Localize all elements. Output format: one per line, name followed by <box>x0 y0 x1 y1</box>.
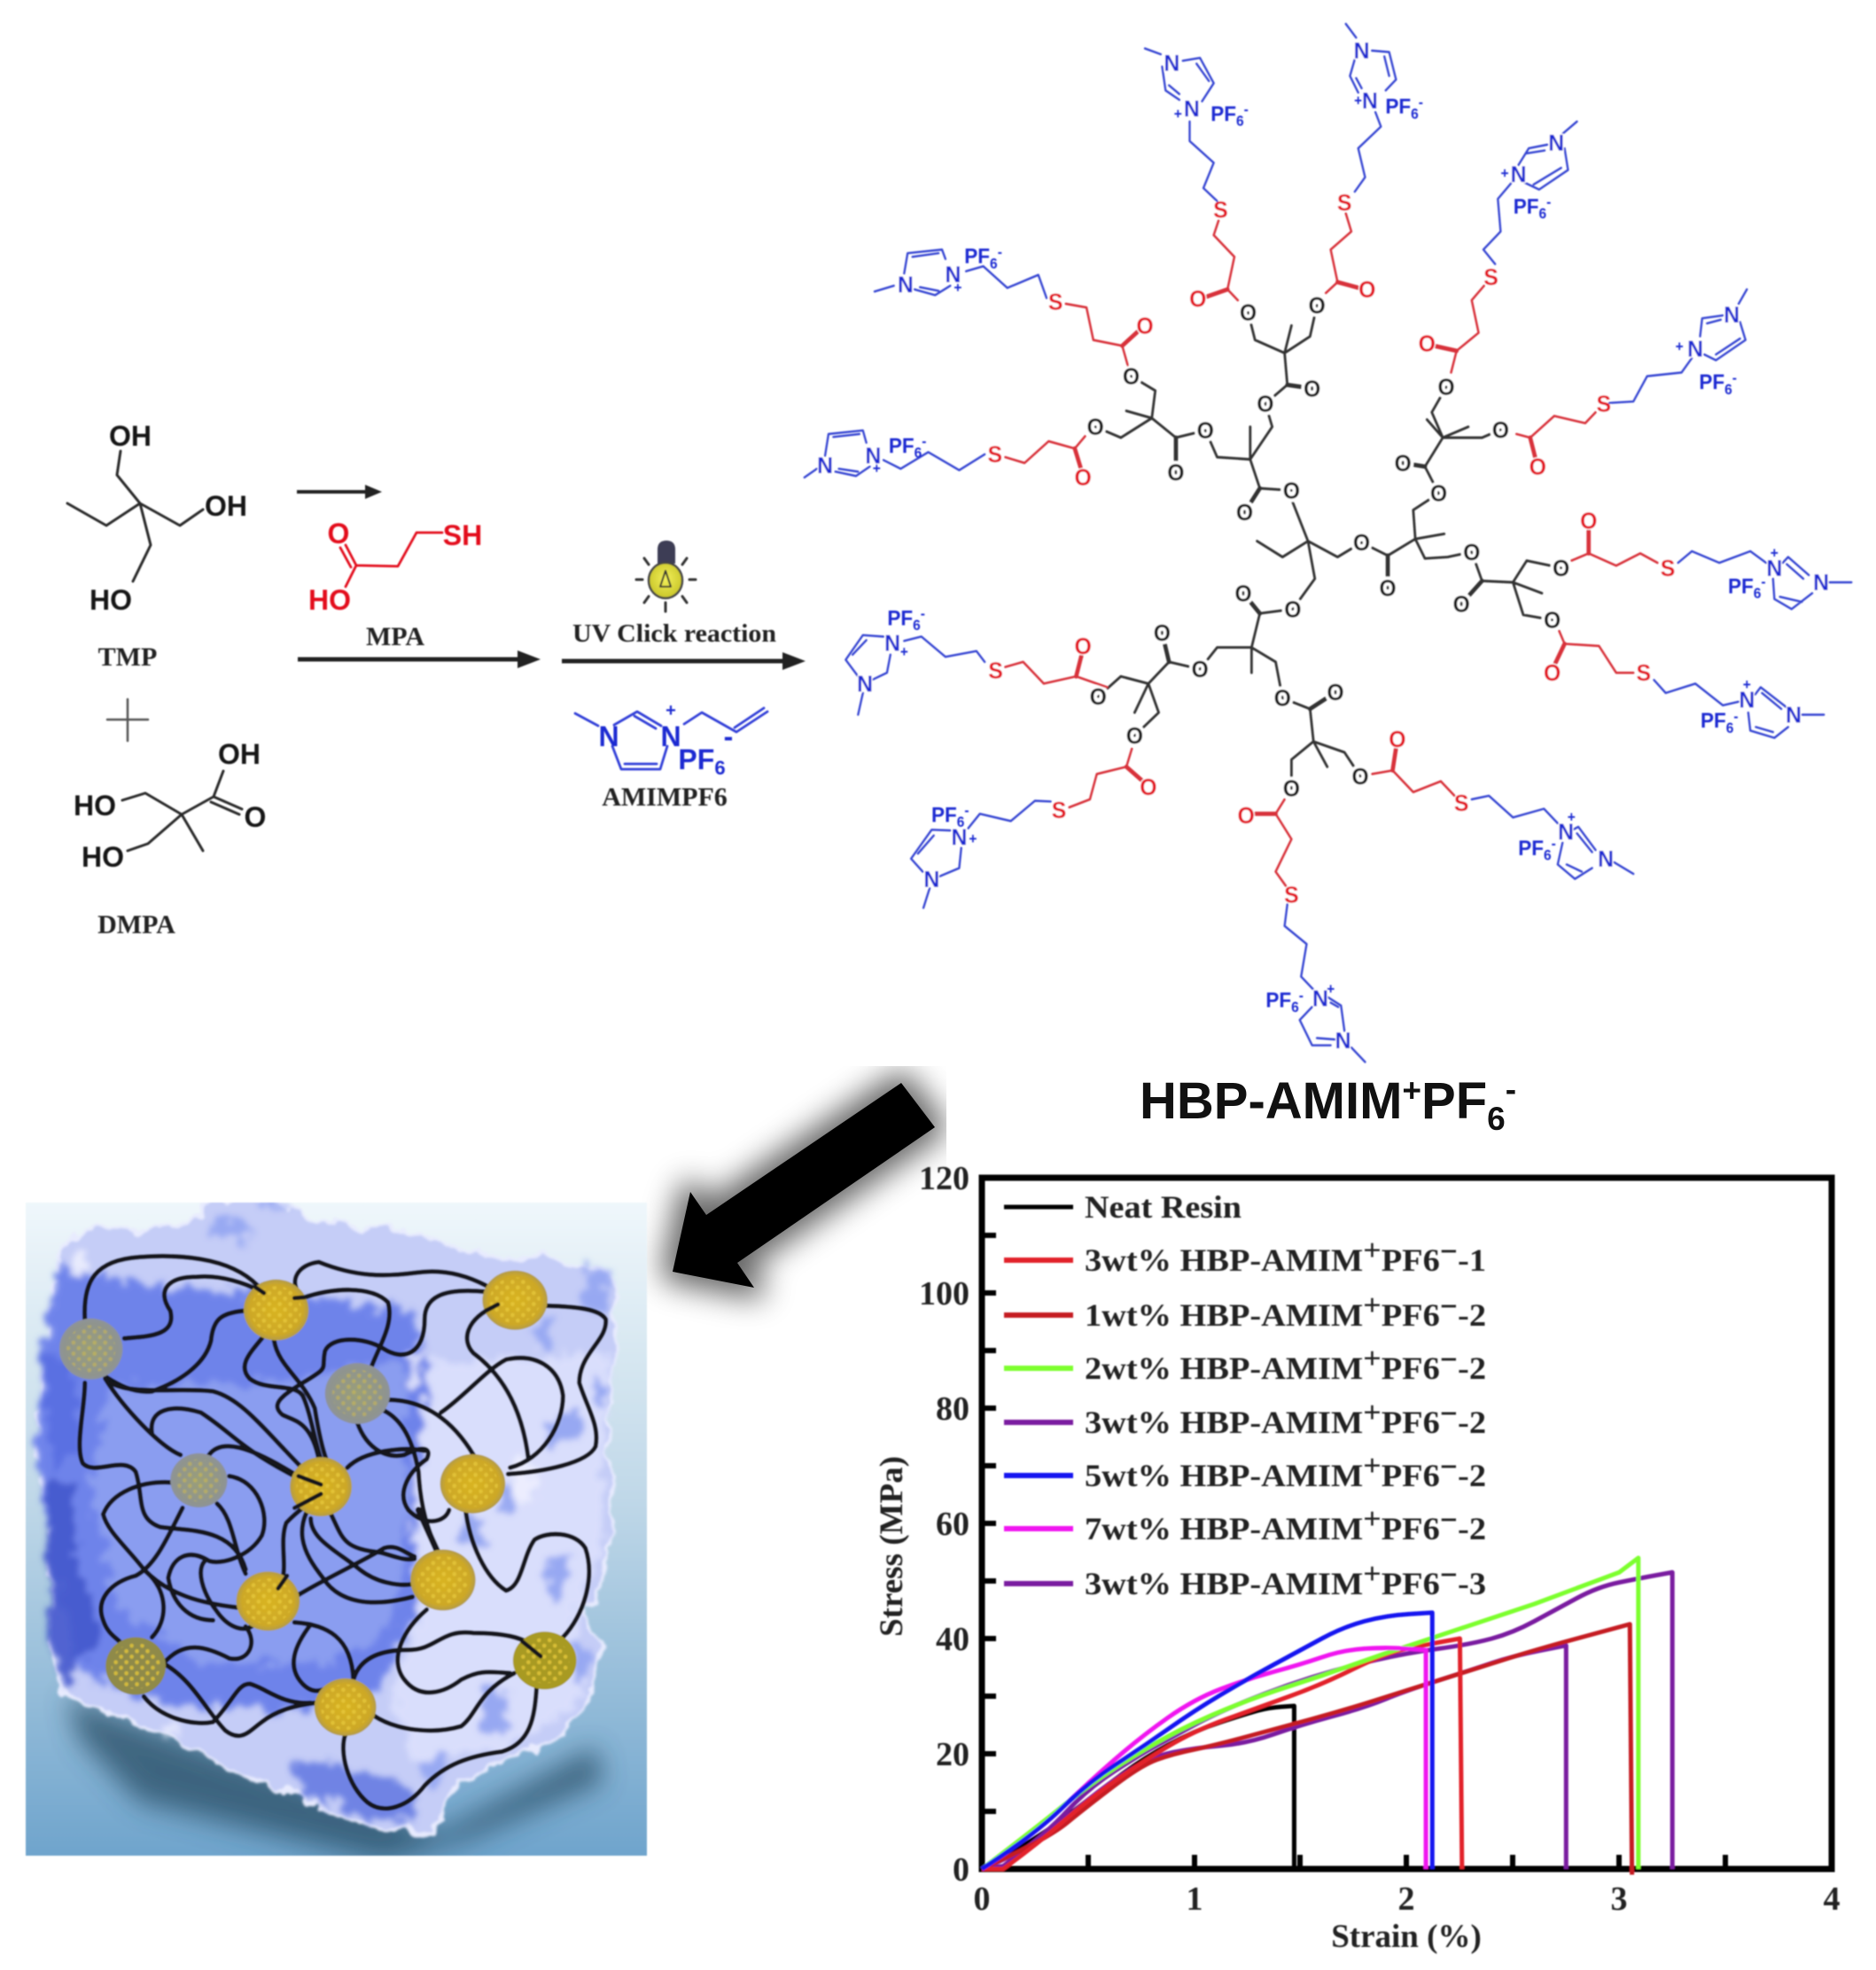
imidazolium arms with PF6- counter-ions (blue): PF <box>1699 370 1724 393</box>
imidazolium arms with PF6- counter-ions (blue): - <box>921 607 925 622</box>
x axis tick labels: 0 <box>973 1880 991 1918</box>
reaction scheme: starting materials and reagents <box>67 420 806 939</box>
thioether linkers (red): O <box>1389 728 1406 752</box>
molecule: TMP <box>67 420 247 672</box>
gel cube body <box>36 1198 616 1832</box>
molecule: MPA (red): HO <box>308 584 351 616</box>
polyester core (black): O <box>1126 724 1143 749</box>
polyester core (black): O <box>1257 392 1274 417</box>
thioether linkers (red): S <box>1052 798 1066 823</box>
legend: PF6 <box>1382 1297 1440 1333</box>
imidazolium arms with PF6- counter-ions (blue): + <box>1354 94 1362 109</box>
y axis title: Stress (MPa) <box>874 1456 910 1637</box>
polyester core (black): O <box>1274 686 1291 712</box>
imidazolium arms with PF6- counter-ions (blue): + <box>1174 107 1182 122</box>
imidazolium arms with PF6- counter-ions (blue): + <box>1676 339 1684 355</box>
imidazolium arms with PF6- counter-ions (blue): 6 <box>1726 721 1733 736</box>
imidazolium arms with PF6- counter-ions (blue): 6 <box>957 815 965 830</box>
imidazolium arms with PF6- counter-ions (blue): N <box>1362 89 1378 114</box>
imidazolium arms with PF6- counter-ions (blue): N <box>1511 162 1527 188</box>
icon: UV light bulb <box>636 541 696 611</box>
polyester core (black): O <box>1154 621 1171 646</box>
thioether linkers (red): S <box>1454 791 1468 816</box>
legend: -2 <box>1458 1405 1486 1440</box>
molecule: AMIMPF6 (blue): + <box>666 701 676 720</box>
imidazolium arms with PF6- counter-ions (blue): 6 <box>1539 206 1546 222</box>
chain ends over nodes <box>256 1288 541 1656</box>
thioether linkers (red): S <box>1337 191 1351 216</box>
x axis tick labels <box>973 1880 1840 1918</box>
y axis tick labels: 60 <box>936 1506 969 1543</box>
legend: -2 <box>1458 1351 1486 1386</box>
polyester core (black): O <box>1086 415 1104 440</box>
polymer chains <box>80 1256 606 1809</box>
imidazolium arms with PF6- counter-ions (blue): + <box>1327 982 1335 998</box>
imidazolium arms with PF6- counter-ions (blue): + <box>1568 810 1576 825</box>
polyester core (black): O <box>1353 531 1370 556</box>
thioether linkers (red): S <box>1284 883 1299 908</box>
polyester core (black): O <box>1308 293 1326 319</box>
molecule: TMP: HO <box>90 584 132 616</box>
title: HBP-AMIM+PF6-: 6 <box>1487 1101 1506 1137</box>
imidazolium arms with PF6- counter-ions (blue): PF <box>1728 574 1754 597</box>
legend: + <box>1363 1289 1382 1322</box>
imidazolium arms with PF6- counter-ions (blue): - <box>922 434 926 450</box>
imidazolium arms with PF6- counter-ions (blue): N <box>865 444 881 469</box>
legend: + <box>1363 1558 1382 1591</box>
thioether linkers (red): S <box>1213 198 1228 223</box>
polyester core (black): O <box>1351 764 1369 790</box>
x axis tick labels: 3 <box>1611 1880 1627 1918</box>
molecule: DMPA: O <box>245 801 266 833</box>
legend: PF6 <box>1382 1242 1440 1278</box>
legend: 3wt% HBP-AMIM <box>1085 1242 1346 1278</box>
curve: 1wt% -2 <box>982 1624 1632 1875</box>
imidazolium arms with PF6- counter-ions (blue): 6 <box>1411 107 1419 122</box>
molecule: AMIMPF6 (blue): N <box>598 720 619 752</box>
molecule: AMIMPF6 (blue): AMIMPF6 <box>602 783 728 812</box>
polyester core (black): O <box>1167 460 1185 486</box>
imidazolium arms with PF6- counter-ions (blue): N <box>1354 39 1370 64</box>
thioether linkers (red): O <box>1075 634 1092 659</box>
polyester core (black): O <box>1492 417 1509 443</box>
imidazolium arms with PF6- counter-ions (blue): + <box>1500 166 1509 182</box>
cast shadow <box>66 1696 603 1862</box>
imidazolium arms with PF6- counter-ions (blue): N <box>884 631 900 657</box>
crosslink nodes: yellow nanoparticles <box>105 1271 576 1736</box>
arrow: MPA step <box>298 650 541 668</box>
x axis title: Strain (%) <box>1331 1919 1482 1955</box>
molecule: AMIMPF6 (blue): PF <box>678 744 714 775</box>
imidazolium arms with PF6- counter-ions (blue): N <box>1548 130 1564 156</box>
molecule: AMIMPF6 (blue): 6 <box>714 757 726 779</box>
legend: PF6 <box>1382 1351 1440 1386</box>
polyester core (black): O <box>1304 377 1320 401</box>
molecule: DMPA: HO <box>74 790 116 821</box>
thioether linkers (red): O <box>1136 314 1154 339</box>
molecule: MPA (red) <box>308 518 482 651</box>
label: UV Click reaction: UV Click reaction <box>572 619 776 648</box>
thioether linkers (red): O <box>1075 465 1092 491</box>
legend: PF6 <box>1382 1566 1440 1601</box>
polyester core (black): O <box>1236 500 1253 526</box>
polyester core (black): O <box>1090 685 1107 710</box>
molecule: AMIMPF6 (blue): N <box>660 720 681 752</box>
legend: PF6 <box>1382 1511 1440 1546</box>
legend: 7wt% HBP-AMIM <box>1085 1511 1346 1546</box>
legend: ⁻ <box>1440 1507 1458 1543</box>
molecule: TMP: OH <box>109 420 152 452</box>
data curves <box>982 1558 1672 1875</box>
legend: + <box>1363 1450 1382 1483</box>
imidazolium arms with PF6- counter-ions (blue): - <box>1552 837 1556 853</box>
arrow: UV click step <box>562 652 806 670</box>
imidazolium arms with PF6- counter-ions (blue): PF <box>1385 95 1411 118</box>
imidazolium arms with PF6- counter-ions (blue): 6 <box>1544 848 1552 864</box>
imidazolium arms with PF6- counter-ions (blue): N <box>898 272 914 298</box>
imidazolium arms with PF6- counter-ions (blue): - <box>1733 710 1739 725</box>
imidazolium arms with PF6- counter-ions (blue): - <box>964 804 969 819</box>
thioether linkers (red): S <box>1637 661 1651 686</box>
legend: -2 <box>1458 1511 1486 1546</box>
legend: 3wt% HBP-AMIM <box>1085 1405 1346 1440</box>
legend: PF6 <box>1382 1458 1440 1493</box>
legend: ⁻ <box>1440 1401 1458 1437</box>
thioether linkers (red): O <box>1580 509 1597 534</box>
polyester core (black): O <box>1123 364 1140 390</box>
y axis tick labels: 120 <box>919 1160 969 1197</box>
thioether linkers (red): O <box>1544 661 1561 686</box>
imidazolium arms with PF6- counter-ions (blue): N <box>1739 688 1755 712</box>
imidazolium arms with PF6- counter-ions (blue): N <box>817 453 833 479</box>
imidazolium arms with PF6- counter-ions (blue): N <box>951 825 967 851</box>
polyester core (black): O <box>1437 375 1455 401</box>
imidazolium arms with PF6- counter-ions (blue): PF <box>889 433 915 457</box>
curve: 3wt% -2 <box>982 1572 1672 1869</box>
crosslink nodes: grey nanoparticles <box>59 1319 390 1507</box>
axis ticks <box>982 1235 1725 1869</box>
x axis tick labels: 1 <box>1186 1880 1203 1918</box>
imidazolium arms with PF6- counter-ions (blue): N <box>1335 1028 1351 1054</box>
polyester core (black): O <box>1283 479 1300 504</box>
molecule: AMIMPF6 (blue): - <box>724 720 733 752</box>
imidazolium arms with PF6- counter-ions (blue): N <box>857 672 873 697</box>
legend: 2wt% HBP-AMIM <box>1085 1351 1346 1386</box>
thioether linkers (red): O <box>1237 803 1255 829</box>
imidazolium arms with PF6- counter-ions (blue): 6 <box>915 446 922 462</box>
polyester core (black): O <box>1283 776 1300 802</box>
x axis tick labels: 4 <box>1824 1880 1840 1918</box>
imidazolium arms with PF6- counter-ions (blue): - <box>1419 95 1423 111</box>
legend: + <box>1363 1343 1382 1375</box>
imidazolium arms with PF6- counter-ions (blue) <box>805 24 1851 1062</box>
molecule: MPA (red): MPA <box>366 622 424 651</box>
y axis tick labels: 0 <box>953 1851 969 1888</box>
legend: + <box>1363 1503 1382 1536</box>
molecule: DMPA: HO <box>82 841 124 873</box>
imidazolium arms with PF6- counter-ions (blue): N <box>1786 703 1802 728</box>
thioether linkers (red): S <box>1661 556 1675 581</box>
polyester core (black): O <box>1463 540 1480 565</box>
panel: hydrogel network illustration <box>26 1198 647 1862</box>
imidazolium arms with PF6- counter-ions (blue): N <box>1813 571 1829 596</box>
legend: ⁻ <box>1440 1562 1458 1598</box>
legend: 1wt% HBP-AMIM <box>1085 1297 1346 1333</box>
imidazolium arms with PF6- counter-ions (blue): 6 <box>990 257 998 272</box>
plot frame <box>982 1178 1832 1869</box>
imidazolium arms with PF6- counter-ions (blue): - <box>1299 989 1304 1004</box>
imidazolium arms with PF6- counter-ions (blue): - <box>1546 195 1551 211</box>
legend: 3wt% HBP-AMIM <box>1085 1566 1346 1601</box>
imidazolium arms with PF6- counter-ions (blue): N <box>1598 846 1614 872</box>
arrow: small step arrow <box>297 485 382 499</box>
thioether linkers (red): O <box>1189 287 1206 312</box>
polyester core (black): O <box>1197 418 1214 444</box>
curve: 7wt% -2 <box>982 1648 1426 1869</box>
imidazolium arms with PF6- counter-ions (blue): N <box>1184 97 1200 122</box>
imidazolium arms with PF6- counter-ions (blue): N <box>1724 303 1740 328</box>
imidazolium arms with PF6- counter-ions (blue): 6 <box>913 619 921 634</box>
plus sign <box>107 699 148 741</box>
thioether linkers (red): O <box>1140 775 1157 800</box>
imidazolium arms with PF6- counter-ions (blue): N <box>1558 820 1574 845</box>
molecule: DMPA: OH <box>218 738 261 770</box>
legend: -1 <box>1458 1242 1486 1278</box>
imidazolium arms with PF6- counter-ions (blue): 6 <box>1291 1001 1299 1016</box>
polyester core (black): O <box>1544 608 1561 634</box>
arrow: large black arrow with soft shadow <box>673 1083 935 1288</box>
title: HBP-AMIM+PF6-: - <box>1506 1071 1516 1108</box>
thioether linkers (red): S <box>1597 392 1611 417</box>
polyester core (black) <box>1086 293 1569 802</box>
molecule: TMP: TMP <box>98 642 157 672</box>
molecule: hyperbranched HBP-AMIM+PF6- <box>805 24 1851 1062</box>
imidazolium arms with PF6- counter-ions (blue): PF <box>964 245 990 268</box>
title: HBP-AMIM+PF6-: PF <box>1421 1072 1487 1130</box>
imidazolium arms with PF6- counter-ions (blue): PF <box>931 803 957 826</box>
imidazolium arms with PF6- counter-ions (blue): 6 <box>1236 114 1244 129</box>
polyester core (black): O <box>1191 658 1209 682</box>
imidazolium arms with PF6- counter-ions (blue): + <box>954 280 961 296</box>
molecule: DMPA <box>74 738 266 939</box>
thioether linkers (red): O <box>1530 455 1546 480</box>
legend: + <box>1363 1397 1382 1429</box>
thioether linkers (red): S <box>988 658 1003 684</box>
y axis tick labels: 40 <box>936 1621 969 1658</box>
imidazolium arms with PF6- counter-ions (blue): N <box>945 262 961 288</box>
y axis tick labels: 100 <box>919 1275 969 1312</box>
imidazolium arms with PF6- counter-ions (blue): + <box>1771 546 1779 561</box>
legend: -3 <box>1458 1566 1486 1601</box>
thioether linkers (red): O <box>1358 277 1375 303</box>
title: HBP-AMIM+PF6-: + <box>1402 1072 1421 1109</box>
polyester core (black): O <box>1394 451 1412 477</box>
curve: 5wt% -2 <box>982 1613 1432 1869</box>
imidazolium arms with PF6- counter-ions (blue): + <box>900 645 908 660</box>
legend: Neat Resin <box>1085 1189 1242 1225</box>
imidazolium arms with PF6- counter-ions (blue): N <box>1687 337 1703 362</box>
thioether linkers (red) <box>988 191 1675 908</box>
thioether linkers (red): S <box>988 442 1002 468</box>
y axis tick labels: 80 <box>936 1390 969 1428</box>
imidazolium arms with PF6- counter-ions (blue): + <box>1743 678 1751 693</box>
thioether linkers (red): S <box>1048 290 1063 315</box>
imidazolium arms with PF6- counter-ions (blue): - <box>1732 371 1737 386</box>
legend: ⁻ <box>1440 1454 1458 1490</box>
imidazolium arms with PF6- counter-ions (blue): PF <box>1265 988 1291 1011</box>
imidazolium arms with PF6- counter-ions (blue): N <box>1766 556 1782 581</box>
thioether linkers (red): S <box>1483 265 1498 291</box>
legend: PF6 <box>1382 1405 1440 1440</box>
molecule: TMP: OH <box>205 490 247 522</box>
polyester core (black): O <box>1553 556 1569 581</box>
imidazolium arms with PF6- counter-ions (blue): + <box>969 831 977 847</box>
curve: 3wt% -1 <box>982 1639 1462 1869</box>
imidazolium arms with PF6- counter-ions (blue): PF <box>1701 709 1726 732</box>
molecule: AMIMPF6 (blue) <box>575 701 767 812</box>
imidazolium arms with PF6- counter-ions (blue): PF <box>1518 836 1544 860</box>
legend: -2 <box>1458 1297 1486 1333</box>
imidazolium arms with PF6- counter-ions (blue): + <box>873 462 881 477</box>
x axis tick labels: 2 <box>1398 1880 1414 1918</box>
curve: neat resin <box>982 1706 1294 1869</box>
polyester core (black): O <box>1284 597 1302 622</box>
imidazolium arms with PF6- counter-ions (blue): 6 <box>1754 587 1762 602</box>
polyester core (black): O <box>1240 300 1257 326</box>
chart: stress-strain curves <box>874 1160 1840 1955</box>
legend: ⁻ <box>1440 1294 1458 1329</box>
molecule: MPA (red): O <box>328 518 349 549</box>
imidazolium arms with PF6- counter-ions (blue): - <box>998 245 1002 261</box>
title: HBP-AMIM+PF6-: HBP-AMIM <box>1140 1072 1402 1130</box>
imidazolium arms with PF6- counter-ions (blue): PF <box>1210 102 1236 125</box>
y axis tick labels: 20 <box>936 1736 969 1773</box>
legend <box>1004 1189 1486 1601</box>
y axis tick labels <box>919 1160 969 1888</box>
curve: 3wt% -3 <box>982 1646 1566 1869</box>
molecule: MPA (red): SH <box>443 519 482 551</box>
polyester core (black): O <box>1234 581 1252 606</box>
imidazolium arms with PF6- counter-ions (blue): 6 <box>1724 383 1732 398</box>
imidazolium arms with PF6- counter-ions (blue): N <box>1312 986 1328 1012</box>
legend: ⁻ <box>1440 1347 1458 1382</box>
imidazolium arms with PF6- counter-ions (blue): N <box>923 867 939 892</box>
legend: + <box>1363 1234 1382 1267</box>
legend: ⁻ <box>1440 1239 1458 1274</box>
imidazolium arms with PF6- counter-ions (blue): PF <box>1514 194 1539 218</box>
polyester core (black): O <box>1452 592 1470 618</box>
thioether linkers (red): O <box>1419 331 1436 357</box>
curve: 2wt% -2 <box>982 1558 1639 1869</box>
legend: 5wt% HBP-AMIM <box>1085 1458 1346 1493</box>
polyester core (black): O <box>1327 681 1344 705</box>
imidazolium arms with PF6- counter-ions (blue): PF <box>887 606 913 629</box>
polyester core (black): O <box>1379 576 1397 602</box>
legend: -2 <box>1458 1458 1486 1493</box>
imidazolium arms with PF6- counter-ions (blue): N <box>1164 51 1179 76</box>
panel background <box>26 1203 647 1856</box>
imidazolium arms with PF6- counter-ions (blue): - <box>1761 575 1766 590</box>
imidazolium arms with PF6- counter-ions (blue): - <box>1244 103 1249 118</box>
molecule: DMPA: DMPA <box>97 910 175 939</box>
polyester core (black): O <box>1430 481 1447 507</box>
